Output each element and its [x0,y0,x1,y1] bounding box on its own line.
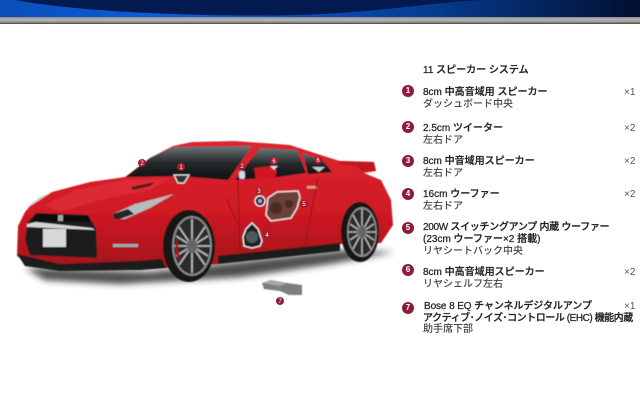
car illustration [17,141,395,295]
item 5 badge [402,222,414,234]
item 3 text: 8cm 中音域用スピーカー [423,156,535,167]
speaker 3: door midrange [255,196,265,206]
item 2 text [423,122,503,146]
left headlight [26,193,50,208]
item 6 badge: 6 [406,265,410,274]
hood vent [131,182,155,190]
callout badge 2 on car, door: 2 [240,164,244,170]
callout badge 7 under amp: 7 [278,299,282,305]
side window [235,148,306,180]
item 6 badge [402,264,414,276]
item 5 text: 200W スイッチングアンプ 内蔵 ウーファー [423,222,609,233]
callout badge 3 on car [256,188,262,195]
front lip [17,254,166,271]
callout badge 2 on car, windshield base: 2 [140,161,144,167]
side skirt [218,243,340,264]
callout badge 1 on car [177,163,185,171]
callout badge 6 on car, front: 6 [272,159,276,165]
item 2 badge: 2 [406,122,410,131]
speaker 6: rear shelf left [312,167,325,172]
callout badge 2 on car, door [238,162,246,170]
callout badge 7 under amp [276,297,284,305]
ground shadow [25,250,395,284]
car body [17,141,393,270]
item 4 badge [402,188,414,200]
door handle [307,186,317,188]
item 2 quantity: ×2 [624,123,635,134]
speaker 2: tweeter [239,171,245,179]
speaker 5: rear subwoofer cutout [266,191,300,221]
item 1 quantity: ×1 [624,87,635,98]
item 6 text [423,266,545,290]
callout badge 6 on car, rear: 6 [316,158,320,164]
hood highlight [45,178,170,212]
item 7 text: アクティブ･ノイズ･コントロール (EHC) 機能内蔵 [423,312,633,324]
item 7 text: 助手席下部 [423,324,473,335]
item 6 text: リヤシェルフ左右 [423,278,503,290]
callout badge 4 on car: 4 [265,233,269,239]
heading: 11 スピーカー システム [423,65,529,76]
item 7 badge: 7 [406,303,410,312]
front number plate [43,229,66,247]
door lines [226,178,318,252]
item 7 text [423,300,634,335]
item 7 badge [402,302,414,314]
door mirror [254,166,277,180]
item 3 text [423,155,535,178]
spoiler [338,161,376,171]
item 1 text: 8cm 中高音域用 スピーカー [423,87,547,98]
item 1 badge [402,85,414,97]
item 3 badge: 3 [406,156,410,165]
callout badge 4 on car [263,231,271,239]
headlight [113,194,174,219]
item 4 badge: 4 [406,189,410,198]
item 7 text: Bose 8 EQ チャンネルデジタルアンプ [424,301,592,312]
item 6 text: 8cm 中高音域用スピーカー [423,267,545,278]
item 6 quantity: ×2 [624,267,635,278]
speaker 1: dashboard [174,175,189,183]
grille [25,213,97,258]
item 1 text: ダッシュボード中央 [423,98,513,110]
item 4 quantity: ×2 [624,189,635,200]
callout badge 3 on car: 3 [257,189,261,195]
item 2 text: 2.5cm ツイーター [423,123,503,134]
callout badge 5 on car [300,200,308,208]
callout badge 1 on car: 1 [179,165,183,171]
item 2 badge [402,121,414,133]
windshield [126,146,252,180]
front wheel [163,210,215,282]
rear wheel [341,202,379,262]
fender vent [113,244,138,247]
item 4 text: 16cm ウーファー [423,189,500,200]
item 2 text: 左右ドア [423,134,463,146]
callout badge 6 on car, front [270,157,278,165]
item 5 text [423,220,609,257]
callout badge 5 on car: 5 [302,202,306,208]
callout badge 6 on car, rear [314,156,322,164]
item 5 badge: 5 [406,223,410,232]
item 1 text [423,86,547,110]
item 5 text: リヤシートバック中央 [423,246,523,257]
grille badge [58,215,63,221]
item 3 quantity: ×2 [624,156,635,167]
speaker 4: door woofer [243,223,262,248]
item 4 text [423,188,500,212]
amplifier [262,280,302,295]
item 3 text: 左右ドア [423,168,463,178]
callout badge 2 on car, windshield base [138,159,146,167]
rear quarter window [303,153,332,174]
speaker 6: rear shelf right [270,166,278,170]
item 5 text: (23cm ウーファー×2 搭載) [423,234,540,245]
item 3 badge [402,155,414,167]
item 1 badge: 1 [406,86,410,95]
item 7 quantity: ×1 [624,301,635,312]
item 4 text: 左右ドア [423,200,463,212]
